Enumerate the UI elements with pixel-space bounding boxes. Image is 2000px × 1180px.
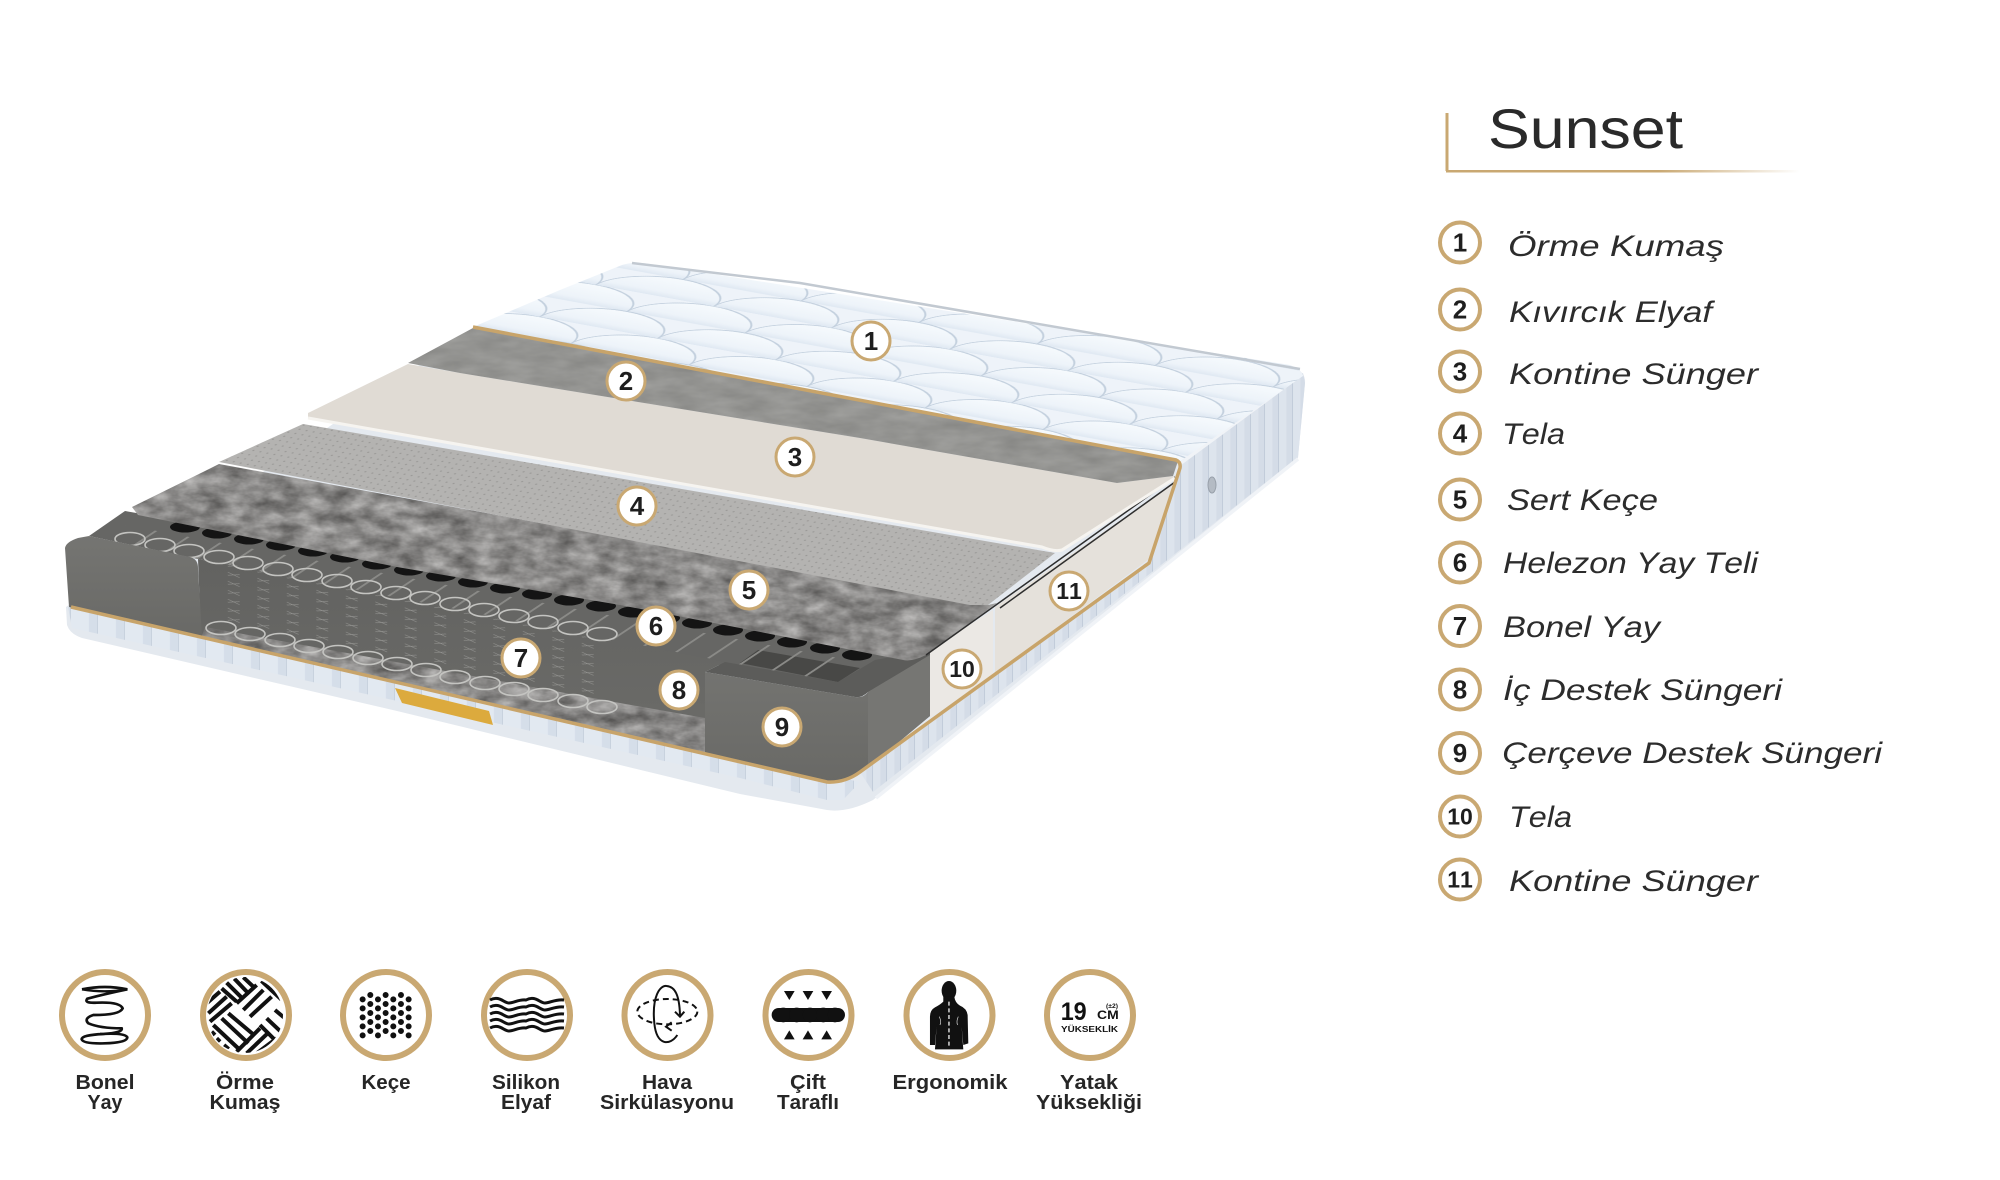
layer: continuous foam top — [308, 364, 1175, 552]
item 7: Bonel Yay — [1503, 611, 1662, 644]
item 10: Tela — [1509, 801, 1572, 834]
item 4 — [1440, 414, 1565, 454]
helix wire pockets — [170, 522, 872, 660]
badge 2 — [607, 362, 645, 400]
icon: ergonomic body: Ergonomik — [892, 1072, 1008, 1094]
badge 9 — [763, 708, 801, 746]
foam frame top — [89, 511, 930, 692]
icon: knit fabric: Kumaş — [210, 1092, 280, 1114]
grid rods — [125, 525, 860, 678]
icon: ergonomic body — [892, 972, 1008, 1094]
item 7: 7 — [1453, 611, 1467, 641]
back edge piping — [632, 263, 1300, 369]
item 1: 1 — [1453, 228, 1467, 258]
badge 6 — [637, 607, 675, 645]
icon: bonel spring — [62, 972, 148, 1114]
front frame support foam — [705, 650, 930, 782]
icon: felt dots: Keçe — [362, 1072, 410, 1094]
item 5: 5 — [1453, 484, 1467, 514]
icon: silicone fibre waves: Silikon — [492, 1072, 560, 1094]
icon: air circulation — [600, 972, 734, 1114]
item 8: 8 — [1453, 674, 1467, 704]
item 8 — [1440, 670, 1784, 710]
item 6: Helezon Yay Teli — [1503, 547, 1759, 580]
layer: tela side — [930, 610, 993, 718]
item 6 — [1440, 542, 1759, 582]
item 11: Kontine Sünger — [1509, 865, 1759, 898]
item 6: 6 — [1453, 548, 1467, 578]
badge 6: 6 — [649, 611, 663, 641]
item 2: 2 — [1453, 294, 1467, 324]
dark pocket squares — [740, 650, 860, 682]
side handle button — [1208, 477, 1216, 493]
badge 3: 3 — [788, 442, 802, 472]
item 9 — [1440, 733, 1884, 773]
lower felt strip — [201, 627, 705, 755]
badge 7: 7 — [514, 643, 528, 673]
item 10: 10 — [1447, 804, 1473, 830]
icon: double sided: Taraflı — [777, 1092, 839, 1114]
side piping — [876, 374, 1302, 798]
legend list — [1440, 222, 1884, 900]
icon: knit fabric: Örme — [216, 1071, 274, 1094]
layer: curled fibre — [408, 328, 1178, 483]
badge 8: 8 — [672, 675, 686, 705]
badge 9: 9 — [775, 712, 789, 742]
item 11 — [1440, 860, 1759, 900]
gold cut outline — [71, 327, 1180, 782]
layer: tela — [219, 424, 1055, 605]
item 7 — [1440, 606, 1662, 646]
icon: double sided — [766, 972, 852, 1114]
badge 1 — [852, 322, 890, 360]
icon: mattress height: Yatak — [1060, 1072, 1119, 1094]
badge 4 — [618, 487, 656, 525]
badge 11 — [1050, 572, 1088, 610]
badge 10 — [943, 650, 981, 688]
layer: felt — [132, 464, 997, 660]
quilted top cover — [473, 263, 1303, 462]
badge 5: 5 — [742, 575, 756, 605]
item 3: 3 — [1453, 356, 1467, 386]
icon: double sided: Çift — [790, 1072, 826, 1094]
badge 11: 11 — [1056, 578, 1082, 604]
icon: knit fabric — [203, 972, 289, 1114]
item 2 — [1440, 290, 1715, 330]
left frame support foam — [65, 536, 202, 637]
layer edge black line — [926, 477, 1175, 655]
icon: bonel spring: Bonel — [76, 1072, 134, 1094]
item 10 — [1440, 796, 1572, 836]
inner support foam — [198, 559, 725, 755]
icon: mattress height: (±2) — [1106, 1003, 1118, 1010]
icon: silicone fibre waves — [484, 972, 570, 1114]
item 5: Sert Keçe — [1507, 484, 1658, 517]
icon: mattress height: Yüksekliği — [1036, 1092, 1142, 1114]
right side ribbed panel — [860, 373, 1305, 792]
item 11: 11 — [1447, 866, 1473, 892]
badge 4: 4 — [630, 491, 645, 521]
icon: air circulation: Hava — [642, 1072, 693, 1094]
layer: continuous foam side — [995, 484, 1173, 673]
item 1 — [1440, 222, 1724, 263]
title: Sunset — [1488, 97, 1683, 160]
front ribbed band — [68, 607, 860, 800]
item 9: Çerçeve Destek Süngeri — [1502, 737, 1884, 770]
bonel springs — [115, 532, 617, 714]
feature icons row — [62, 972, 1142, 1114]
icon: silicone fibre waves: Elyaf — [501, 1092, 551, 1114]
foam lower lip — [308, 418, 1175, 551]
item 3: Kontine Sünger — [1509, 358, 1759, 391]
badge 7 — [502, 639, 540, 677]
icon: mattress height: YÜKSEKLİK — [1061, 1025, 1118, 1034]
gold logo label — [395, 688, 493, 725]
badge 1: 1 — [864, 326, 878, 356]
icon: mattress height: CM — [1097, 1008, 1119, 1022]
icon: mattress height — [1036, 972, 1142, 1114]
icon: bonel spring: Yay — [88, 1092, 123, 1114]
badge 10: 10 — [949, 656, 975, 682]
mattress body — [66, 328, 1305, 811]
icon: mattress height: 19 — [1061, 998, 1087, 1026]
item 5 — [1440, 480, 1658, 520]
item 4: 4 — [1453, 418, 1468, 448]
item 2: Kıvırcık Elyaf — [1509, 296, 1715, 329]
icon: air circulation: Sirkülasyonu — [600, 1092, 734, 1114]
item 4: Tela — [1502, 418, 1565, 451]
item 8: İç Destek Süngeri — [1503, 674, 1784, 707]
icon: felt dots — [343, 972, 429, 1094]
mattress illustration — [65, 263, 1305, 811]
badge 2: 2 — [619, 366, 633, 396]
badge 8 — [660, 671, 698, 709]
item 1: Örme Kumaş — [1508, 230, 1724, 263]
badge 3 — [776, 438, 814, 476]
badge 5 — [730, 571, 768, 609]
item 3 — [1440, 352, 1759, 392]
item 9: 9 — [1453, 738, 1467, 768]
